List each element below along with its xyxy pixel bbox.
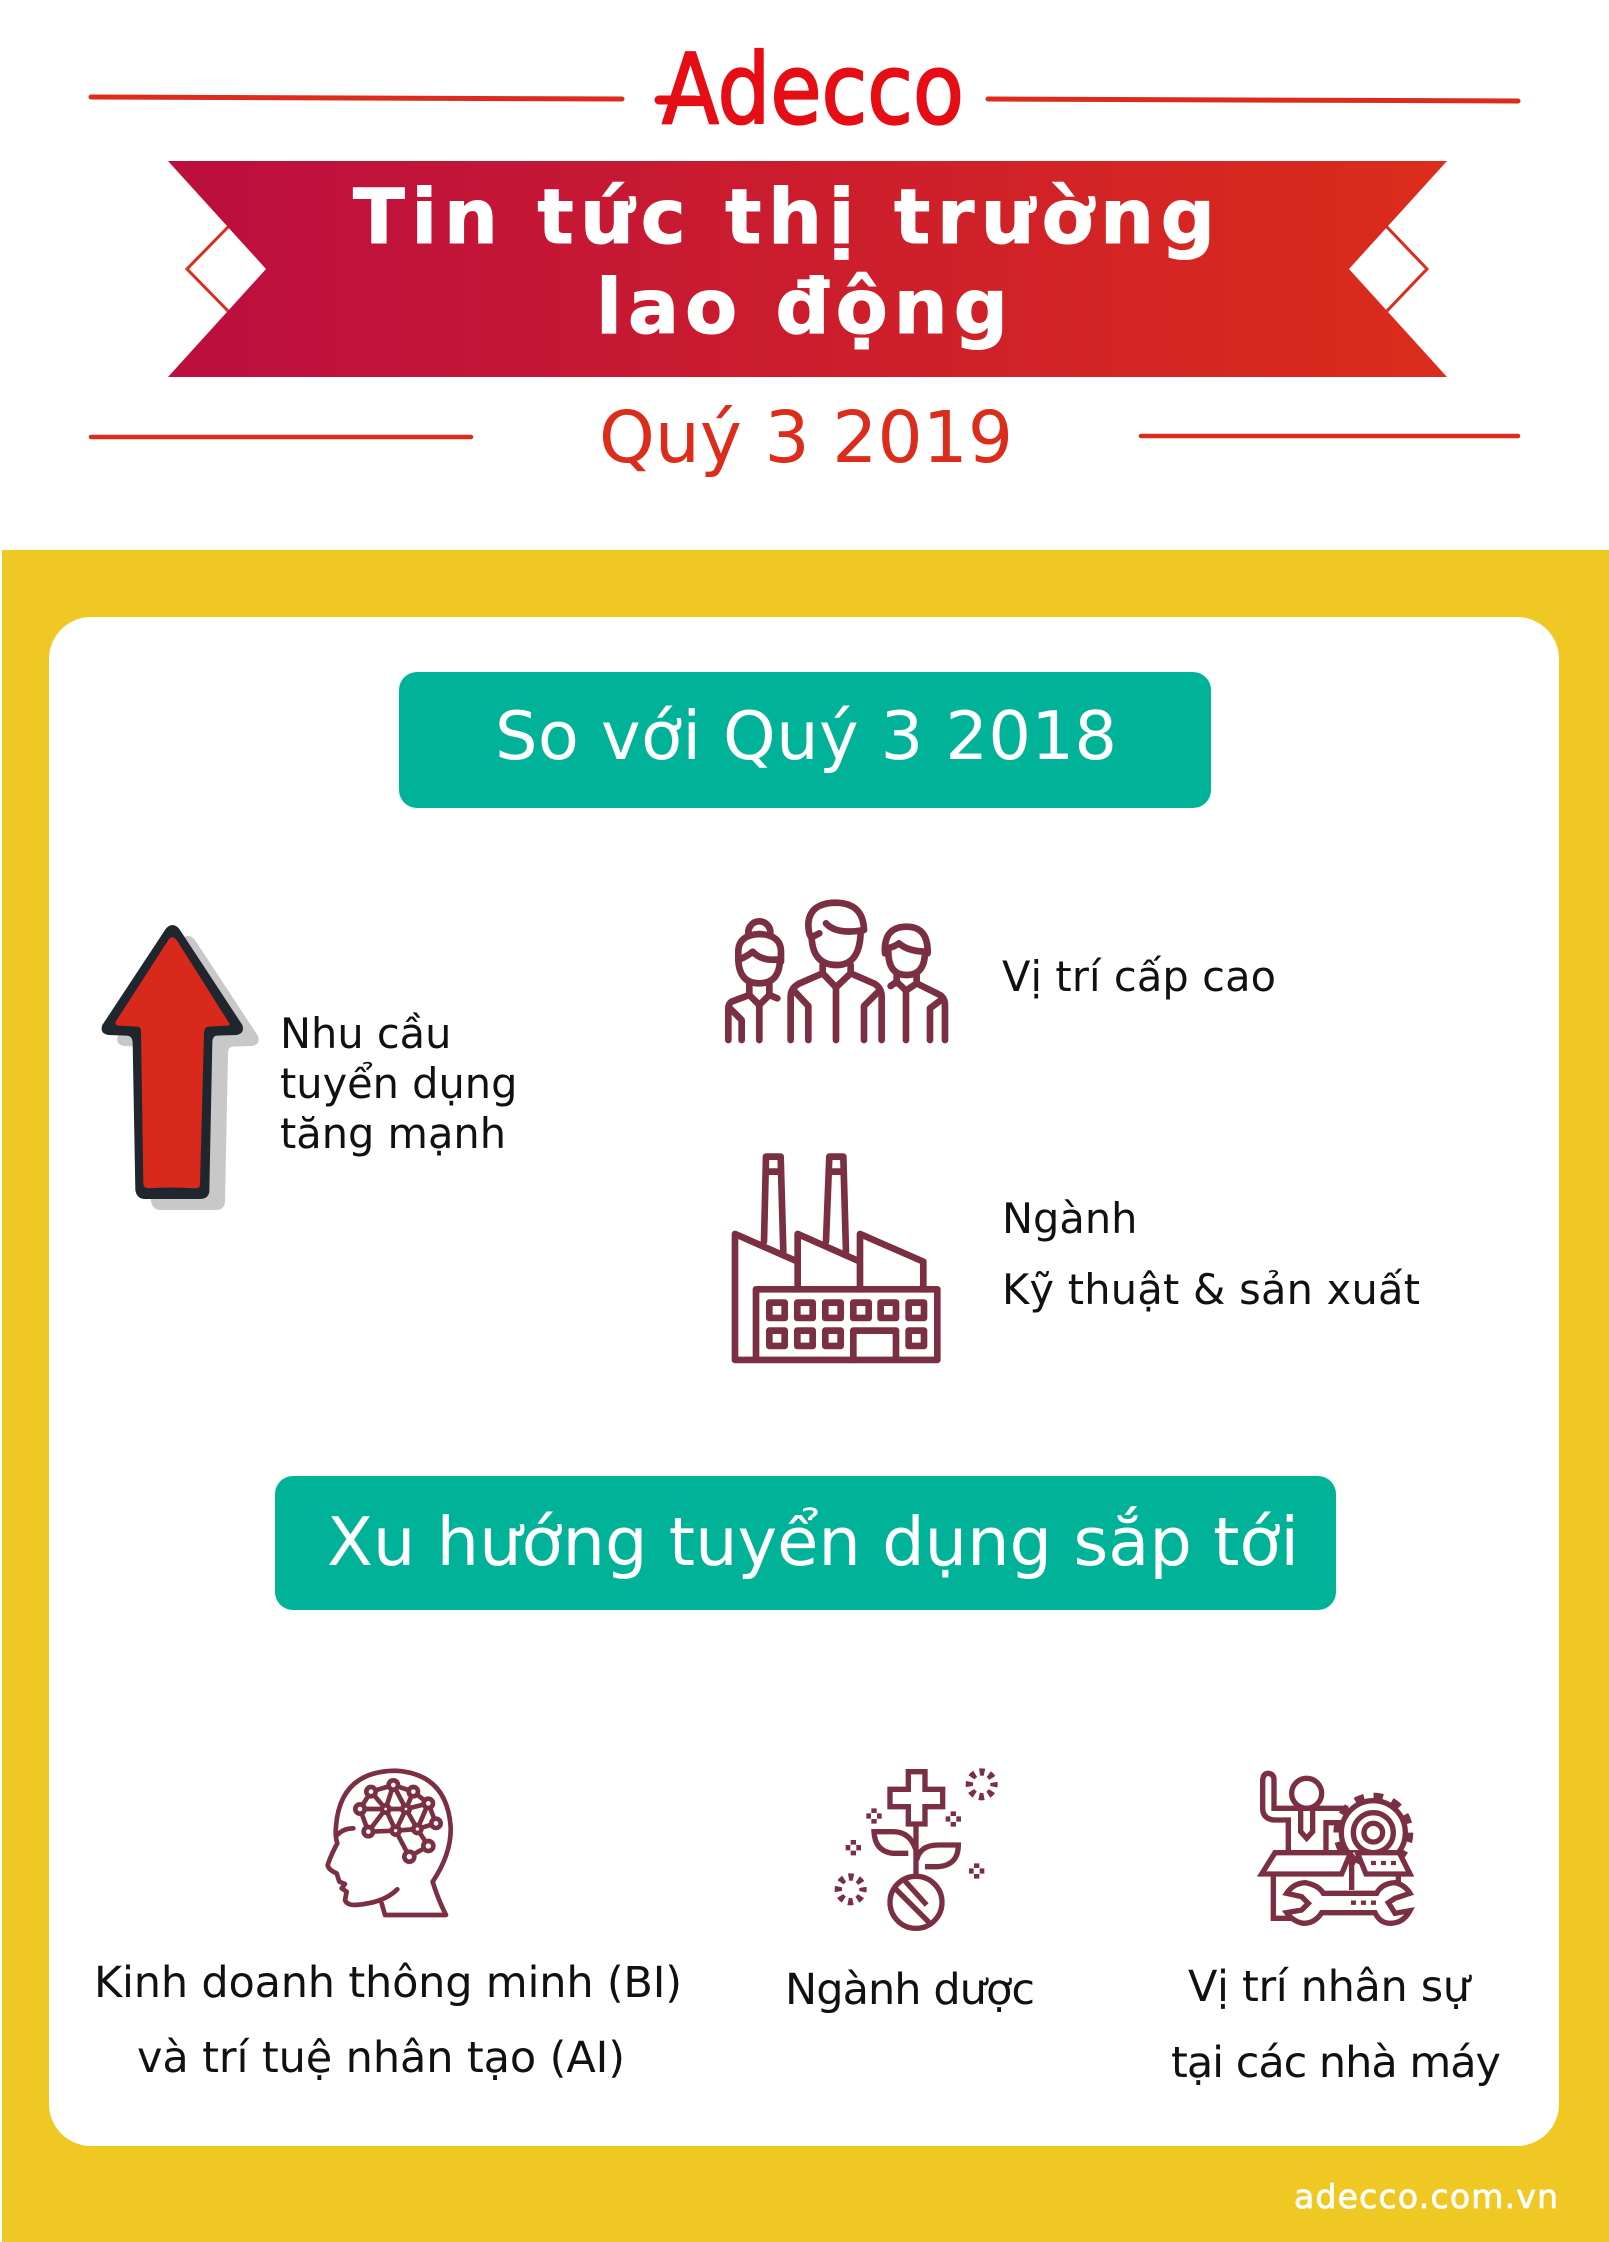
- text: demand rises: tuyển dụng: [280, 1059, 517, 1108]
- text: demand rises: [280, 1009, 517, 1158]
- section heading: upcoming trends: Xu hướng tuyển dụng sắp tới: [327, 1503, 1299, 1581]
- text: engineering and manufacturing: [1002, 1194, 1420, 1314]
- title: lao động: [596, 262, 1008, 351]
- section heading: comparison: So với Quý 3 2018: [495, 697, 1117, 775]
- ribbon banner: [168, 161, 1447, 377]
- icon: pharma plant: [838, 1772, 994, 1928]
- title: Tin tức thị trường: [353, 172, 1215, 261]
- text: demand rises: tăng mạnh: [280, 1109, 506, 1158]
- white content panel: [49, 617, 1559, 2146]
- title: [353, 172, 1215, 351]
- text: senior positions: Vị trí cấp cao: [1002, 952, 1276, 1001]
- text: BI and AI: [94, 1958, 682, 2083]
- icon: red up arrow: [102, 925, 259, 1210]
- header rule: top right: [988, 99, 1518, 101]
- text: BI and AI: và trí tuệ nhân tạo (AI): [137, 2033, 625, 2083]
- header rule: bottom right: [1141, 434, 1518, 438]
- icon: brain: [328, 1771, 451, 1915]
- text: pharma: Ngành dược: [785, 1965, 1035, 2015]
- website: adecco.com.vn: [1294, 2177, 1558, 2216]
- icon: people: [728, 903, 945, 1040]
- text: factory HR positions: [1171, 1962, 1501, 2088]
- text: BI and AI: Kinh doanh thông minh (BI): [94, 1958, 682, 2008]
- text: demand rises: Nhu cầu: [280, 1009, 451, 1058]
- text: engineering and manufacturing: Kỹ thuật & sản xuất: [1002, 1265, 1420, 1314]
- text: engineering and manufacturing: Ngành: [1002, 1194, 1137, 1243]
- text: factory HR positions: tại các nhà máy: [1171, 2038, 1501, 2088]
- icon: factory HR: [1262, 1773, 1410, 1923]
- header rule: bottom left: [91, 435, 471, 439]
- logo: Adecco: Adecco: [662, 33, 964, 146]
- icon: factory: [735, 1157, 937, 1360]
- section heading: upcoming trends: [275, 1476, 1336, 1610]
- subtitle: quarter: Quý 3 2019: [599, 396, 1013, 479]
- yellow background panel: [2, 550, 1609, 2242]
- text: factory HR positions: Vị trí nhân sự: [1188, 1962, 1473, 2012]
- section heading: comparison: [399, 672, 1211, 808]
- header rule: top left: [91, 97, 622, 99]
